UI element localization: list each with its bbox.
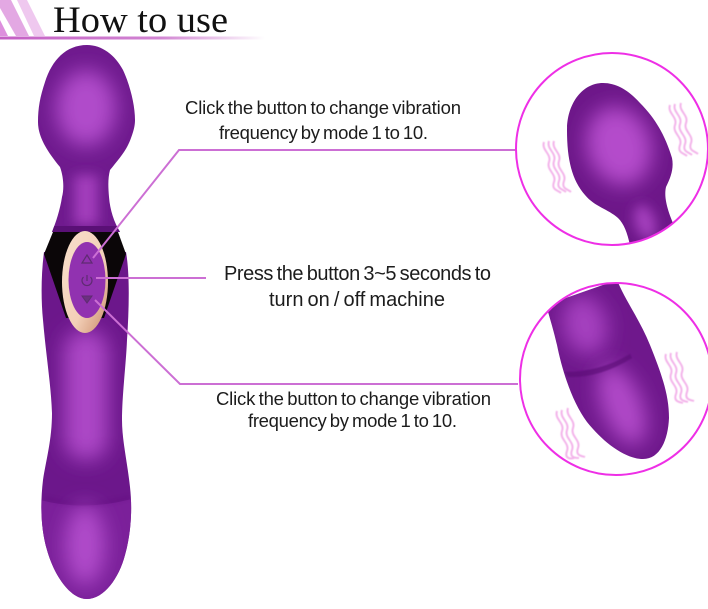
detail circle: wand base vibrating bbox=[520, 275, 708, 475]
text: upper button instruction bbox=[185, 97, 461, 143]
rose gold control bezel bbox=[62, 231, 108, 333]
detail circle: wand head vibrating bbox=[516, 53, 708, 255]
callout line: power button bbox=[96, 277, 206, 279]
wand head bbox=[38, 45, 135, 232]
callout line: upper button bbox=[93, 150, 516, 258]
vibration waves left bbox=[543, 141, 571, 193]
icon: power bbox=[82, 275, 92, 286]
title banner bbox=[0, 0, 265, 41]
text: power button instruction: turn on / off machine bbox=[269, 289, 445, 311]
text: upper button instruction: frequency by mode 1 to 10. bbox=[219, 122, 428, 143]
base close-up bbox=[548, 284, 669, 459]
wand body bbox=[41, 252, 132, 599]
vibration waves right bbox=[665, 352, 694, 403]
text: lower button instruction: Click the button to change vibration bbox=[216, 388, 491, 409]
purple button panel bbox=[68, 242, 106, 318]
vibration waves right bbox=[669, 103, 698, 156]
title: How to use bbox=[53, 0, 228, 41]
decorative stripes bbox=[0, 0, 45, 36]
text: power button instruction bbox=[224, 263, 491, 311]
text: power button instruction: Press the button 3~5 seconds to bbox=[224, 263, 491, 285]
text: lower button instruction bbox=[216, 388, 491, 431]
black control collar bbox=[44, 232, 126, 318]
text: lower button instruction: frequency by mode 1 to 10. bbox=[248, 410, 457, 431]
vibration waves left bbox=[556, 408, 585, 458]
circle outline bbox=[516, 53, 708, 245]
product: massage wand bbox=[38, 45, 135, 599]
title rule bbox=[0, 36, 265, 40]
icon: down arrow bbox=[82, 296, 92, 303]
circle outline bbox=[520, 283, 708, 475]
callout line: lower button bbox=[95, 300, 518, 384]
text: upper button instruction: Click the button to change vibration bbox=[185, 97, 461, 118]
icon: up arrow bbox=[82, 255, 92, 263]
head close-up bbox=[567, 83, 673, 242]
